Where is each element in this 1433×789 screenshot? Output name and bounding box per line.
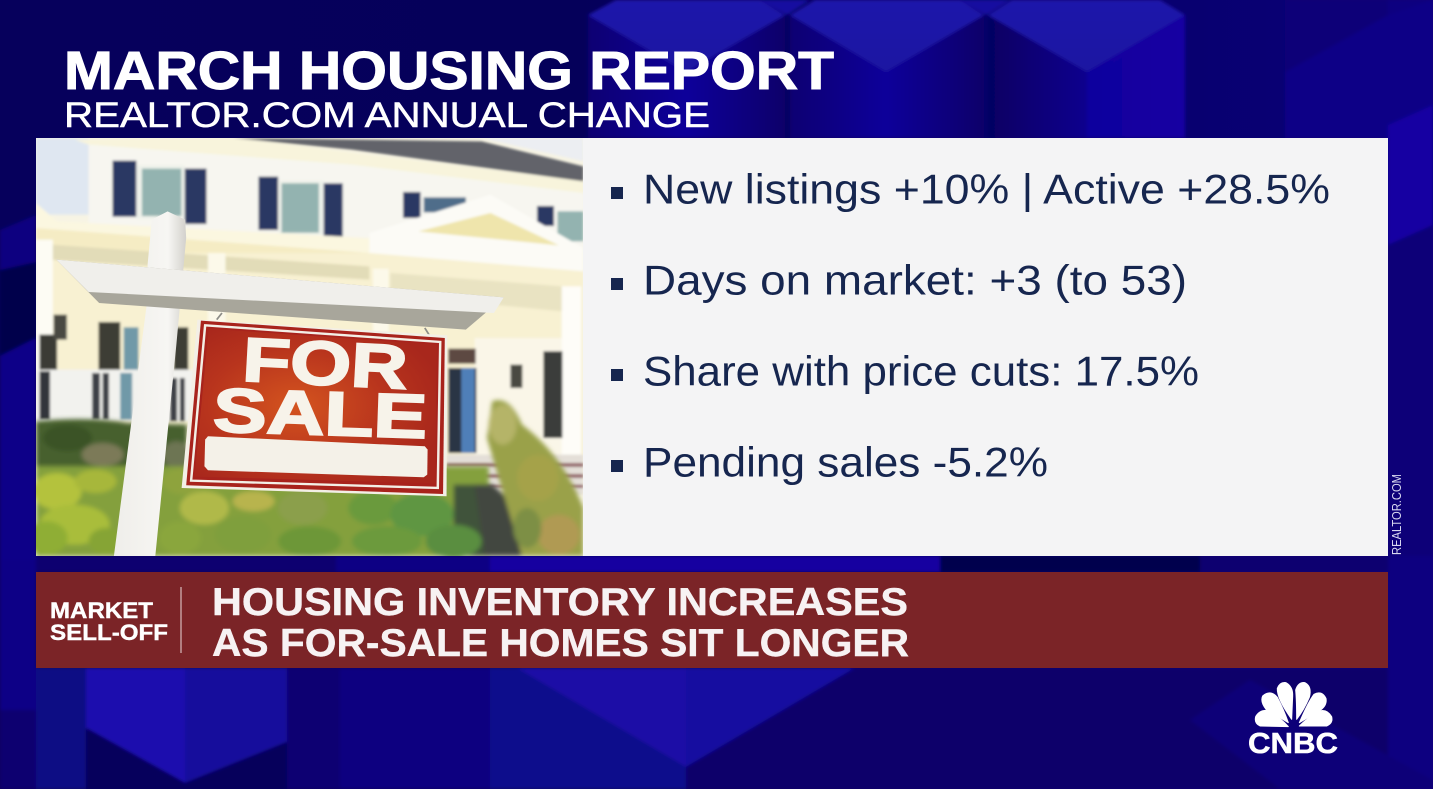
bullet: price cuts: Share with price cuts: 17.5% <box>643 348 1199 394</box>
gable <box>369 195 583 271</box>
bullet: pending sales: Pending sales -5.2% <box>643 438 1048 486</box>
subtitle: REALTOR.COM ANNUAL CHANGE <box>64 96 710 135</box>
railing <box>36 370 194 421</box>
banner tag <box>50 598 168 645</box>
sign text: FOR <box>241 325 409 402</box>
bullet: days on market: Days on market: +3 (to 53) <box>643 256 1187 304</box>
steps <box>447 455 583 495</box>
banner headline: HOUSING INVENTORY INCREASES <box>212 581 908 624</box>
panel: white bullet panel <box>583 138 1388 556</box>
sign arm <box>56 260 504 330</box>
banner headline <box>212 581 909 665</box>
for sale placard <box>182 320 447 496</box>
shrubs and hedges <box>25 400 583 558</box>
title: MARCH HOUSING REPORT <box>64 41 834 101</box>
banner headline: AS FOR-SALE HOMES SIT LONGER <box>212 622 909 665</box>
logo: CNBC peacock <box>1248 683 1338 760</box>
banner tag: SELL-OFF <box>50 620 168 645</box>
logo wordmark: CNBC <box>1248 728 1338 760</box>
porch roof <box>36 203 369 255</box>
bullet: listings: New listings +10% | Active +28.5% <box>643 166 1330 212</box>
bullet list <box>611 166 1330 486</box>
photo: house with for-sale sign <box>25 138 583 558</box>
columns <box>36 238 54 370</box>
for sale placard: SALE <box>212 376 428 452</box>
sign post <box>114 211 186 556</box>
banner tag: MARKET <box>50 598 154 623</box>
source credit: REALTOR.COM <box>1389 474 1404 555</box>
lower windows <box>38 333 59 372</box>
sign hooks <box>217 313 429 335</box>
banner: headline strip <box>36 572 1388 668</box>
